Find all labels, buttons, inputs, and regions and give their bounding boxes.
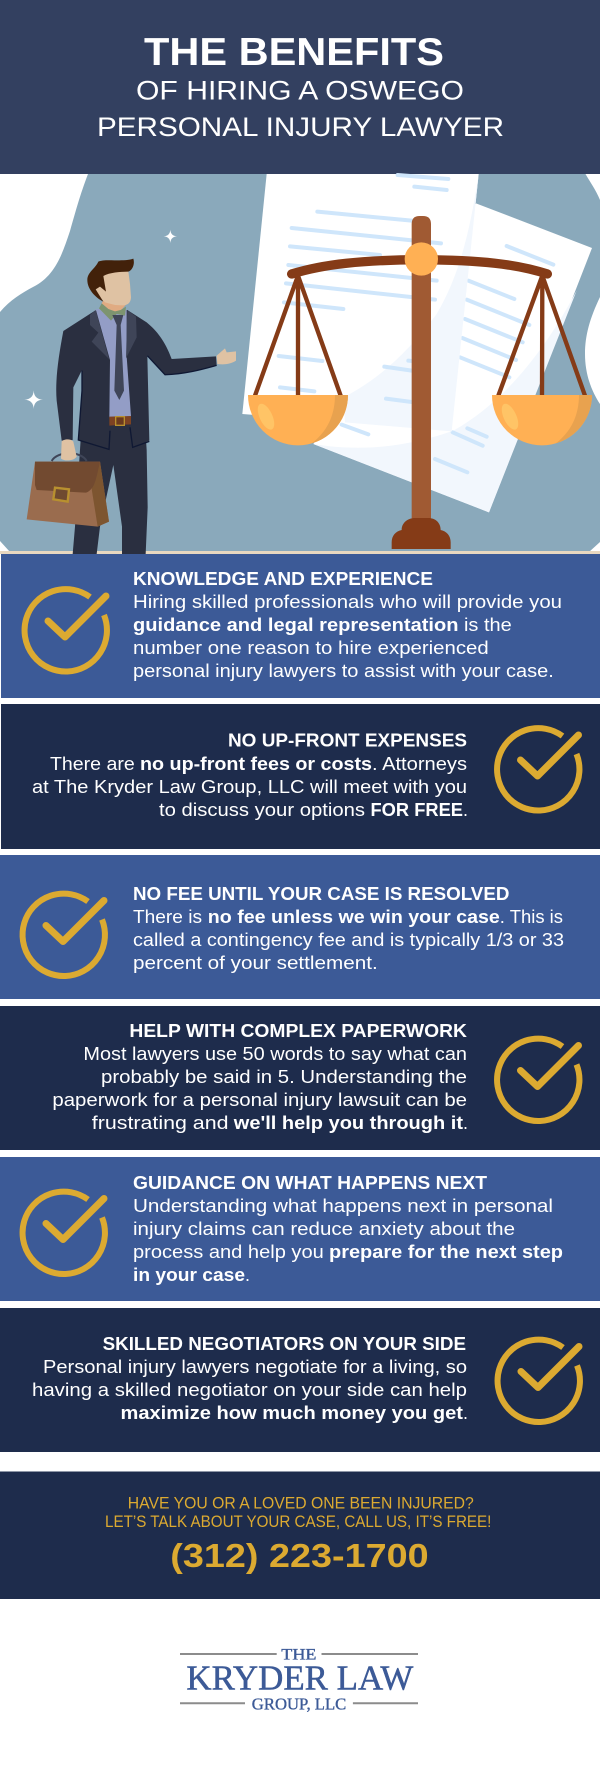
body text: injury claims can reduce anxiety about the — [133, 1219, 515, 1239]
cream floor line — [0, 551, 600, 554]
body text: . This is — [500, 907, 563, 927]
body text: Understanding what happens next in personal — [133, 1196, 553, 1216]
body text: Most lawyers use 50 words to say what can — [83, 1044, 467, 1064]
documents — [242, 174, 592, 512]
body text: FOR FREE — [370, 800, 463, 820]
logo rules — [180, 1654, 418, 1703]
icon: check circle — [497, 1039, 579, 1121]
hero illustration — [0, 174, 600, 554]
body text: number one reason to hire experienced — [133, 638, 489, 658]
logo text — [186, 1647, 413, 1714]
body text: Hiring skilled professionals who will provide you — [133, 592, 562, 612]
face — [96, 271, 131, 305]
body text: process and help you — [133, 1242, 324, 1262]
panel: no fee until your case is resolved — [0, 855, 600, 999]
hero background blob — [0, 174, 600, 552]
body text: having a skilled negotiator on your side can help — [32, 1380, 467, 1400]
icon: check circle — [498, 1340, 580, 1422]
body text: is the — [464, 615, 512, 635]
scale strings — [255, 276, 585, 396]
body text: personal injury lawyers to assist with your case. — [133, 661, 554, 681]
sparkle small — [164, 230, 177, 243]
body text: Personal injury lawyers negotiate for a living, so — [43, 1357, 467, 1377]
body text — [133, 1196, 563, 1285]
left pan — [248, 395, 348, 445]
body text: no fee unless we win your case — [208, 907, 500, 927]
neck — [102, 300, 126, 312]
body text: called a contingency fee and is typically 1/3 or 33 — [133, 930, 564, 950]
icon: check circle — [23, 894, 105, 976]
heading: HELP WITH COMPLEX PAPERWORK — [129, 1021, 467, 1041]
body text — [133, 592, 562, 681]
body text: prepare for the next step — [329, 1242, 563, 1262]
collar — [99, 303, 126, 321]
lawyer figure with briefcase — [24, 230, 236, 554]
sparkle large — [24, 390, 43, 409]
panel: skilled negotiators on your side — [0, 1308, 600, 1452]
body text: There is — [133, 907, 202, 927]
body text: probably be said in 5. Understanding the — [101, 1067, 467, 1087]
panel: knowledge and experience — [1, 554, 600, 698]
left hand — [61, 439, 77, 460]
heading: NO FEE UNTIL YOUR CASE IS RESOLVED — [133, 884, 509, 904]
briefcase — [27, 462, 109, 527]
body text: frustrating and — [92, 1113, 228, 1133]
tie — [112, 315, 124, 400]
pivot — [405, 242, 438, 276]
call to action text: HAVE YOU OR A LOVED ONE BEEN INJURED? — [128, 1494, 474, 1512]
heading: GUIDANCE ON WHAT HAPPENS NEXT — [133, 1173, 487, 1193]
title line 3: PERSONAL INJURY LAWYER — [97, 112, 504, 142]
body text: . — [463, 1403, 468, 1423]
briefcase handle — [52, 453, 87, 461]
body text: There are — [50, 754, 135, 774]
shirt — [96, 309, 131, 417]
hair — [87, 259, 134, 302]
icon: check circle — [23, 1192, 105, 1274]
body text: paperwork for a personal injury lawsuit can be — [52, 1090, 467, 1110]
call to action text — [105, 1494, 491, 1531]
heading: NO UP-FRONT EXPENSES — [228, 731, 467, 751]
scale beam — [292, 260, 547, 274]
heading: SKILLED NEGOTIATORS ON YOUR SIDE — [103, 1334, 466, 1354]
body text — [32, 754, 468, 820]
panel: guidance on what happens next — [0, 1157, 600, 1301]
body text — [133, 907, 564, 973]
jacket — [56, 310, 217, 449]
icon: check circle — [25, 589, 107, 672]
scale base — [392, 518, 451, 549]
logo: The Kryder Law Group, LLC — [180, 1647, 418, 1714]
body text: . Attorneys — [372, 754, 467, 774]
right pan — [492, 395, 592, 445]
logo text: THE — [281, 1647, 316, 1664]
body text: in your case — [133, 1265, 245, 1285]
logo text: KRYDER LAW — [186, 1659, 413, 1698]
scales of justice — [248, 216, 592, 549]
back document — [313, 203, 592, 512]
body text — [52, 1044, 468, 1133]
logo text: GROUP, LLC — [252, 1695, 346, 1714]
panel: help with complex paperwork — [0, 1006, 600, 1150]
heading: KNOWLEDGE AND EXPERIENCE — [133, 569, 433, 589]
jacket dark outlines — [78, 356, 217, 449]
body text: we'll help you through it — [233, 1113, 463, 1133]
title line 1: THE BENEFITS — [144, 31, 444, 74]
belt — [109, 416, 131, 426]
body text: . — [463, 800, 468, 820]
title line 2: OF HIRING A OSWEGO — [136, 76, 464, 106]
call to action text: LET’S TALK ABOUT YOUR CASE, CALL US, IT’S FREE! — [105, 1513, 491, 1531]
body text: guidance and legal representation — [133, 615, 458, 635]
body text: to discuss your options — [159, 800, 365, 820]
body text: . — [463, 1113, 468, 1133]
body text: at The Kryder Law Group, LLC will meet with you — [32, 777, 467, 797]
trousers — [73, 424, 148, 554]
call to action panel — [0, 1472, 600, 1599]
body text: maximize how much money you get — [120, 1403, 463, 1423]
icon: check circle — [497, 728, 579, 811]
body text: . — [245, 1265, 250, 1285]
panel: no up-front expenses — [1, 704, 600, 849]
phone number: (312) 223-1700 — [170, 1537, 429, 1574]
body text — [32, 1357, 468, 1423]
scale pole — [412, 216, 431, 521]
front document — [242, 174, 479, 434]
right hand — [217, 348, 236, 364]
body text: percent of your settlement. — [133, 953, 378, 973]
lapels — [90, 310, 137, 359]
body text: no up-front fees or costs — [140, 754, 372, 774]
header: title — [0, 0, 600, 174]
